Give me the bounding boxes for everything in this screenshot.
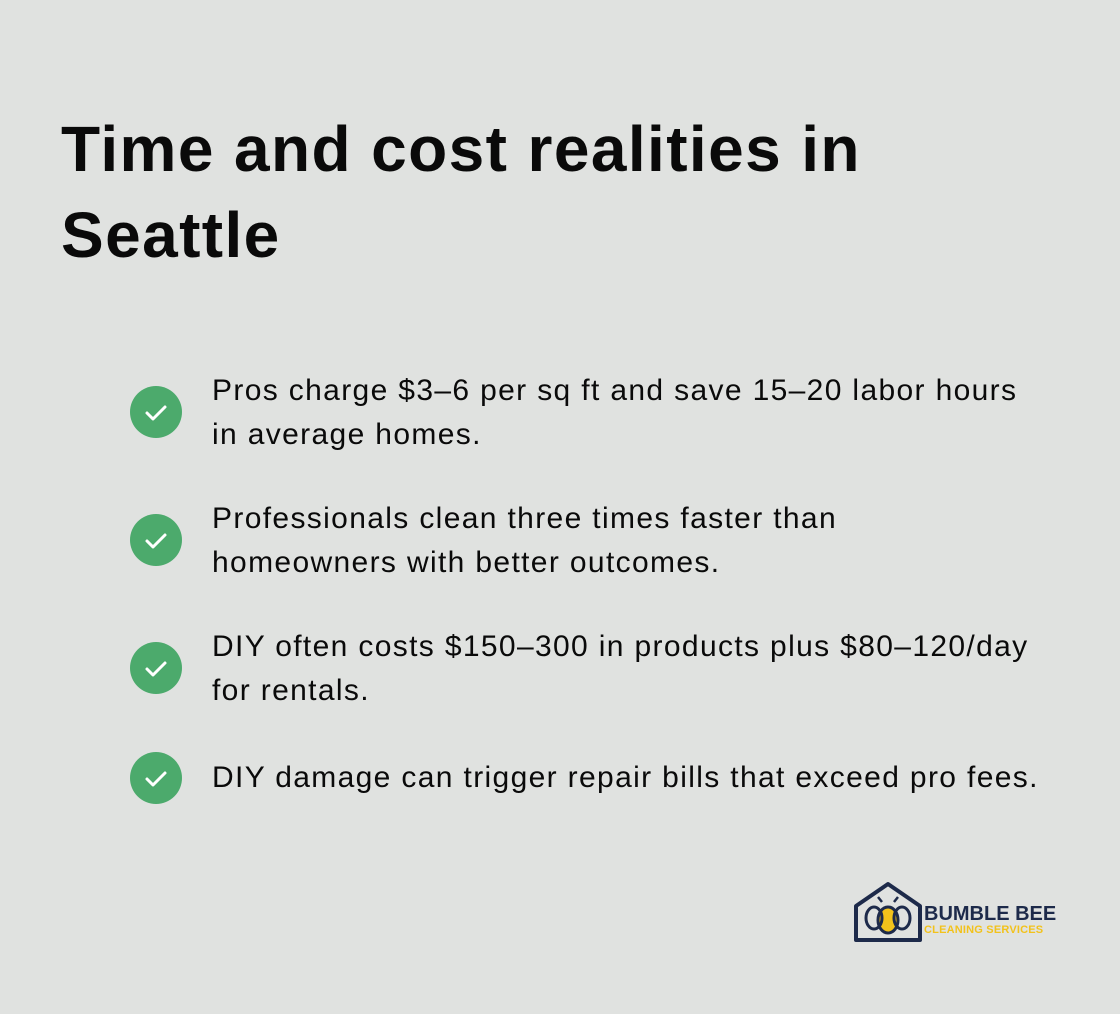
title: Seattle bbox=[61, 199, 281, 271]
item 3 bbox=[130, 630, 1029, 707]
text 3: DIY often costs $150–300 in products plus $80–120/day bbox=[212, 630, 1029, 663]
text 2: Professionals clean three times faster than bbox=[212, 502, 837, 535]
item 4 bbox=[130, 752, 1039, 804]
icon: check bbox=[130, 514, 182, 566]
logo text bbox=[924, 903, 1056, 936]
icon: bee house bbox=[854, 882, 922, 942]
text 1: in average homes. bbox=[212, 418, 482, 451]
icon: check bbox=[130, 642, 182, 694]
text 2 bbox=[212, 502, 837, 579]
icon: check bbox=[130, 386, 182, 438]
logo text: BUMBLE BEE bbox=[924, 903, 1056, 925]
item 1 bbox=[130, 374, 1017, 451]
text 1: Pros charge $3–6 per sq ft and save 15–20 labor hours bbox=[212, 374, 1017, 407]
text 4: DIY damage can trigger repair bills that exceed pro fees. bbox=[212, 761, 1039, 794]
logo text: CLEANING SERVICES bbox=[924, 924, 1043, 936]
text 3 bbox=[212, 630, 1029, 707]
logo bbox=[854, 882, 1056, 942]
text 1 bbox=[212, 374, 1017, 451]
text 2: homeowners with better outcomes. bbox=[212, 546, 720, 579]
title: Time and cost realities in bbox=[61, 113, 861, 185]
title bbox=[61, 113, 861, 271]
icon: check bbox=[130, 752, 182, 804]
item 2 bbox=[130, 502, 837, 579]
text 3: for rentals. bbox=[212, 674, 370, 707]
